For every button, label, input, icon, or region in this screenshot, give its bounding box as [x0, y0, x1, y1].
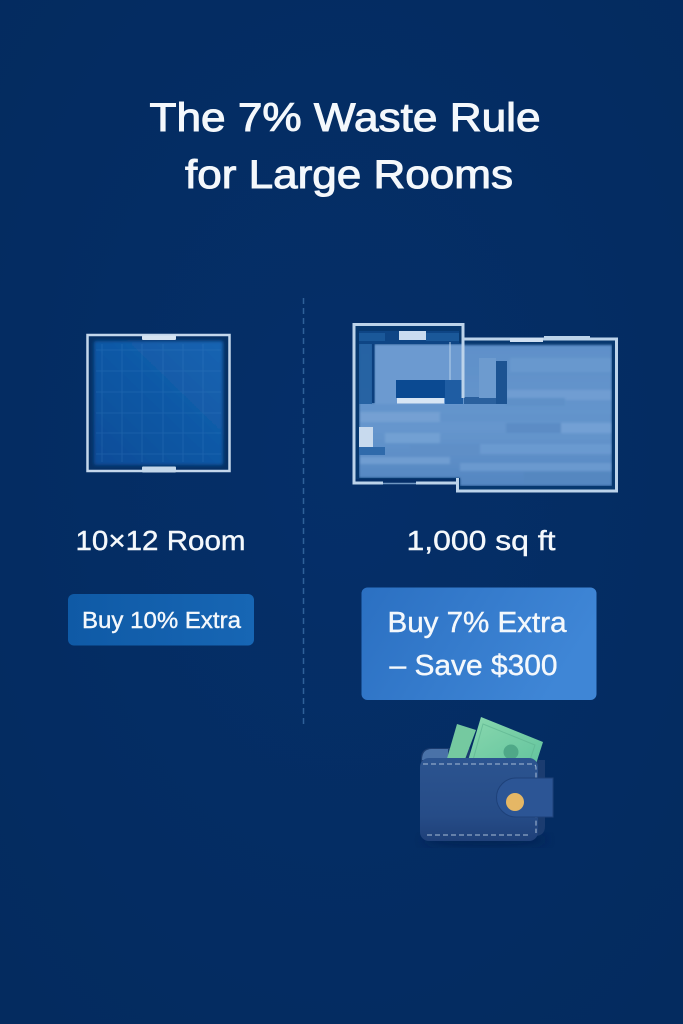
title: for Large Rooms [185, 153, 513, 197]
cash [446, 717, 543, 764]
small button: buy 10% extra [68, 594, 254, 646]
counter [464, 358, 507, 404]
window fixture [399, 331, 426, 340]
kitchen island [396, 380, 463, 404]
wallet clasp [496, 778, 553, 817]
small room floor plan [88, 335, 230, 472]
title [150, 96, 540, 197]
stove [359, 427, 373, 447]
large room label: 1,000 sq ft [406, 525, 556, 556]
icon: wallet with cash [420, 717, 553, 845]
walls [354, 324, 463, 483]
large button: buy 7% extra save $300 [362, 588, 596, 700]
title: The 7% Waste Rule [150, 96, 540, 140]
wallet back [421, 748, 545, 836]
small button: buy 10% extra: Buy 10% Extra [82, 607, 241, 633]
divider [302, 298, 304, 727]
large room floor plan [354, 324, 616, 491]
floor planks [359, 331, 612, 486]
wallet body [420, 758, 538, 841]
large button: buy 7% extra save $300: – Save $300 [390, 650, 558, 682]
small room label: 10×12 Room [76, 525, 246, 556]
large button: buy 7% extra save $300: Buy 7% Extra [388, 607, 567, 639]
